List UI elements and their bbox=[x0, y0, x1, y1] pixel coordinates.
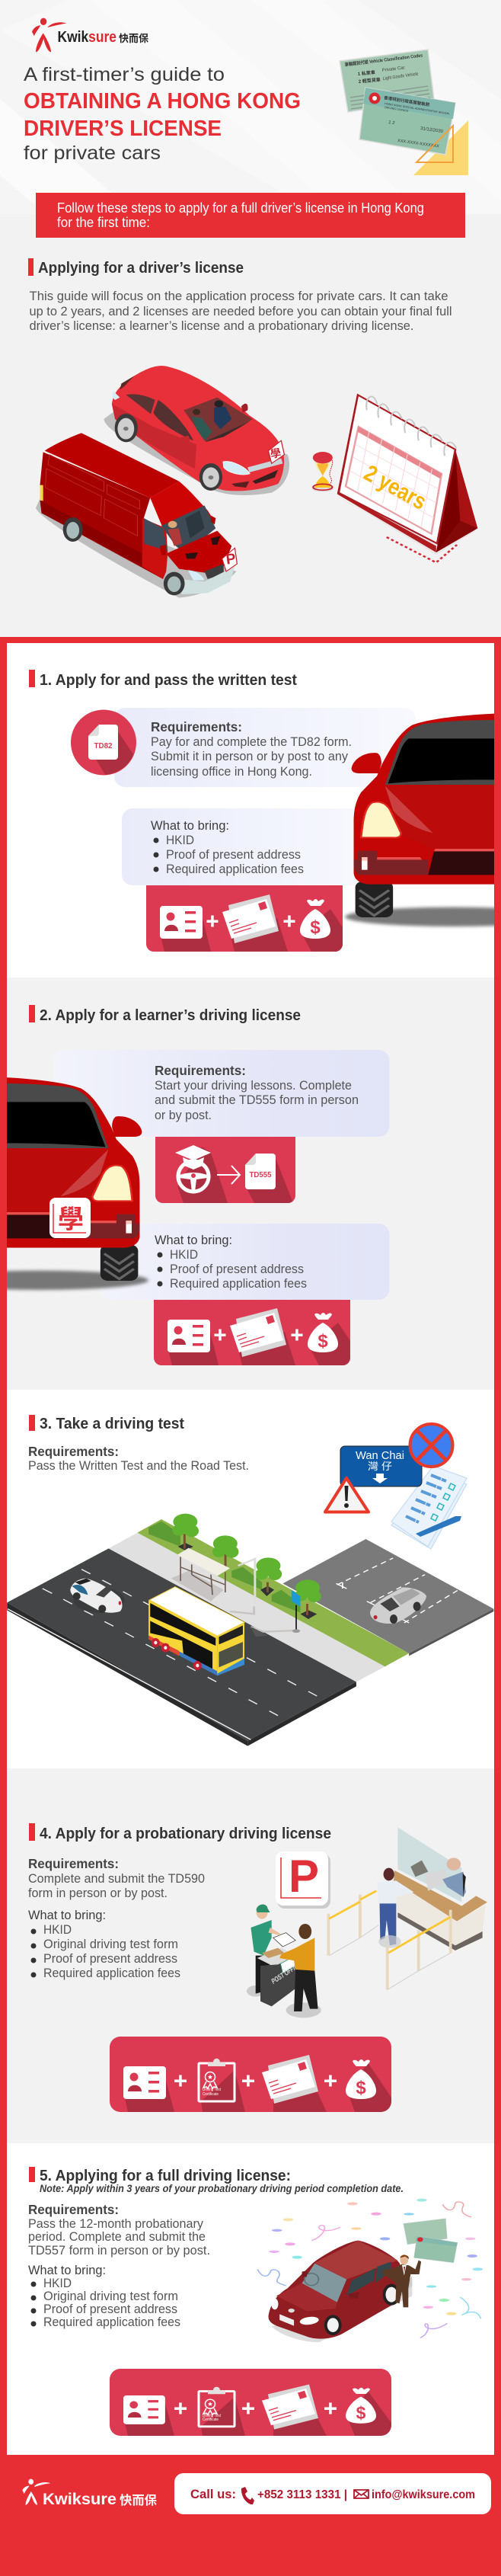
what to bring list: What to bring: bbox=[28, 1908, 106, 1922]
intro paragraph: up to 2 years, and 2 licenses are needed before you can obtain your final full bbox=[29, 305, 452, 318]
icon: driving license cards: DRIVING LICENCE bbox=[385, 106, 409, 113]
post office label: POST OFFICE bbox=[270, 1960, 303, 1986]
logo: Kwiksure bbox=[32, 18, 148, 52]
illustration: red probationary van bbox=[36, 433, 237, 597]
requirements bubble: and submit the TD555 form in person bbox=[155, 1093, 359, 1107]
contact bar bbox=[174, 2473, 491, 2514]
title bbox=[24, 64, 301, 164]
white car bbox=[74, 1587, 125, 1613]
icon: hourglass and calendar bbox=[312, 394, 477, 562]
bus bbox=[148, 1600, 217, 1675]
footer logo: 快而保 bbox=[120, 2494, 157, 2507]
panel: step 1 bbox=[29, 670, 501, 952]
red frame top and step sections bbox=[0, 637, 501, 2455]
intro banner: Follow these steps to apply for a full driver’s license in Hong Kong bbox=[57, 200, 424, 216]
requirements text bbox=[28, 1856, 205, 1900]
illustration: customer at post office bbox=[279, 1924, 321, 2018]
illustration: learner car front: 學 bbox=[58, 1205, 84, 1234]
requirements bubble: Start your driving lessons. Complete bbox=[155, 1079, 352, 1093]
what to bring list: Original driving test form bbox=[43, 2290, 178, 2303]
documents panel bbox=[110, 2037, 391, 2112]
title: OBTAINING A HONG KONG bbox=[24, 89, 301, 114]
requirements text: Requirements: bbox=[28, 1444, 119, 1459]
icon: driving license cards: 2 輕型貨車 bbox=[358, 76, 381, 85]
note: Note: Apply within 3 years of your probationary driving period completion date. bbox=[40, 2182, 404, 2194]
step 5 heading: 5. Applying for a full driving license: bbox=[40, 2168, 291, 2184]
panel: step 5 bbox=[28, 2167, 483, 2436]
documents panel: Certificate bbox=[203, 2418, 219, 2422]
requirements text: Complete and submit the TD590 bbox=[28, 1872, 205, 1886]
what to bring bubble: What to bring: bbox=[151, 818, 229, 833]
what to bring bubble: Proof of present address bbox=[170, 1262, 304, 1276]
what to bring list: HKID bbox=[43, 2277, 72, 2290]
requirements bubble bbox=[114, 708, 416, 787]
icon: driving license cards: 1 私家車 bbox=[357, 69, 375, 77]
footer bbox=[0, 2455, 501, 2576]
what to bring list: What to bring: bbox=[28, 2263, 106, 2277]
intro banner bbox=[36, 193, 465, 238]
what to bring bubble bbox=[100, 1224, 390, 1300]
icon: P plate bbox=[276, 1851, 330, 1909]
title: DRIVER’S LICENSE bbox=[24, 117, 222, 141]
illustration: learner car front bbox=[0, 1077, 148, 1290]
logo: Kwiksure: 快而保 bbox=[119, 33, 148, 44]
icon: driving license cards: Light Goods Vehicle bbox=[382, 72, 419, 82]
what to bring bubble: Required application fees bbox=[166, 862, 304, 876]
lesson and form panel bbox=[155, 1137, 295, 1203]
intro banner: for the first time: bbox=[57, 215, 150, 230]
requirements bubble: Requirements: bbox=[151, 719, 242, 734]
title: A first-timer’s guide to bbox=[24, 64, 225, 85]
icon: driving license cards: 31/12/2030 bbox=[420, 126, 444, 134]
intro paragraph: driver’s license: a learner’s license and a probationary driving license. bbox=[29, 319, 414, 333]
requirements text: Pass the 12-month probationary bbox=[28, 2217, 204, 2231]
documents panel: $ bbox=[356, 2078, 366, 2098]
intro paragraph bbox=[29, 290, 452, 333]
step 2 heading: 2. Apply for a learner’s driving license bbox=[40, 1007, 301, 1024]
icon: driving license cards bbox=[340, 50, 468, 175]
illustration: red car front bbox=[345, 714, 501, 926]
illustration: road scene bbox=[7, 1514, 493, 1746]
icon: driving license cards: Private Car bbox=[382, 66, 405, 73]
requirements bubble: licensing office in Hong Kong. bbox=[151, 765, 312, 779]
panel: step 2 bbox=[0, 1005, 390, 1365]
grey car bbox=[370, 1587, 426, 1624]
probationary plate letter: P bbox=[225, 551, 237, 568]
icon: driving license cards: XXX-XXXX-XXXXXXX bbox=[397, 139, 439, 149]
icon: TD82 form bbox=[71, 710, 136, 776]
what to bring list bbox=[28, 2263, 180, 2329]
requirements text: Pass the Written Test and the Road Test. bbox=[28, 1459, 249, 1473]
courier bbox=[247, 1986, 264, 1997]
what to bring bubble: HKID bbox=[166, 834, 194, 847]
requirements bubble: Pay for and complete the TD82 form. bbox=[151, 735, 352, 749]
documents panel bbox=[110, 2369, 391, 2436]
red frame sides bbox=[0, 643, 501, 2456]
requirements bubble: Requirements: bbox=[155, 1063, 246, 1078]
contact bar: info@kwiksure.com bbox=[372, 2488, 475, 2501]
what to bring list: Original driving test form bbox=[43, 1938, 178, 1951]
panel: step 3 bbox=[7, 1415, 493, 1746]
heading: applying for a driver's license: Applying for a driver’s license bbox=[38, 260, 244, 277]
requirements text bbox=[28, 1444, 249, 1473]
requirements text: form in person or by post. bbox=[28, 1886, 168, 1900]
contact bar: +852 3113 1331 | bbox=[257, 2488, 347, 2501]
documents panel: $ bbox=[356, 2403, 366, 2423]
what to bring list: Proof of present address bbox=[43, 1952, 177, 1966]
requirements text: Requirements: bbox=[28, 2202, 119, 2217]
step 1 heading: 1. Apply for and pass the written test bbox=[40, 672, 297, 689]
what to bring list: Required application fees bbox=[43, 2315, 180, 2329]
title: for private cars bbox=[24, 142, 161, 164]
requirements text: Requirements: bbox=[28, 1856, 119, 1871]
documents panel: $ bbox=[310, 917, 321, 938]
icon: driving license cards: 1 2 bbox=[388, 120, 395, 126]
what to bring bubble bbox=[122, 808, 373, 885]
illustration: red learner car bbox=[104, 366, 289, 495]
icon: P plate: P bbox=[289, 1851, 319, 1902]
icon: driving license cards: 車輛類別代號 Vehicle Classification Codes bbox=[344, 52, 423, 68]
illustration: licensing counter bbox=[247, 1827, 487, 2006]
lesson and form panel: TD555 bbox=[250, 1170, 272, 1179]
step 4 heading: 4. Apply for a probationary driving license bbox=[40, 1826, 331, 1842]
requirements text: period. Complete and submit the bbox=[28, 2230, 206, 2244]
contact bar: Call us: bbox=[190, 2487, 236, 2501]
documents panel: Certificate bbox=[203, 2092, 219, 2097]
requirements bubble bbox=[53, 1050, 390, 1137]
icon: hourglass and calendar: 2 years bbox=[360, 460, 431, 515]
panel: step 4 bbox=[28, 1823, 487, 2112]
footer logo: Kwiksure bbox=[43, 2491, 116, 2508]
what to bring bubble: HKID bbox=[170, 1248, 198, 1262]
requirements text bbox=[28, 2202, 210, 2258]
documents panel: Driving Test bbox=[203, 2414, 221, 2418]
illustration: road signs and test sheet: 灣 仔 bbox=[368, 1461, 392, 1472]
documents panel: $ bbox=[318, 1331, 328, 1352]
illustration: road signs and test sheet: Wan Chai bbox=[356, 1449, 404, 1462]
what to bring list: HKID bbox=[43, 1923, 72, 1937]
documents panel bbox=[154, 1300, 350, 1365]
footer logo bbox=[22, 2479, 157, 2508]
documents panel: Driving Test bbox=[203, 2088, 221, 2092]
what to bring bubble: Required application fees bbox=[170, 1277, 307, 1291]
icon: driving license cards: HONG KONG SPECIAL ADMINISTRATIVE REGION bbox=[385, 102, 450, 116]
step 3 heading: 3. Take a driving test bbox=[40, 1416, 184, 1432]
illustration: car, licensed driver and confetti bbox=[257, 2199, 483, 2342]
requirements text: TD557 form in person or by post. bbox=[28, 2244, 210, 2258]
what to bring list: Proof of present address bbox=[43, 2302, 177, 2316]
icon: TD82 form: TD82 bbox=[94, 741, 113, 750]
icon: driving license cards: 香港特別行政區駕駛執照 bbox=[384, 94, 430, 108]
what to bring list bbox=[28, 1908, 180, 1980]
requirements bubble: or by post. bbox=[155, 1109, 212, 1122]
what to bring bubble: Proof of present address bbox=[166, 848, 301, 862]
logo: Kwiksure: Kwiksure bbox=[58, 29, 116, 46]
illustration: road signs and test sheet bbox=[325, 1424, 467, 1549]
documents panel bbox=[146, 885, 343, 952]
requirements bubble: Submit it in person or by post to any bbox=[151, 750, 349, 763]
what to bring bubble: What to bring: bbox=[155, 1233, 232, 1247]
intro paragraph: This guide will focus on the application process for private cars. It can take bbox=[29, 290, 448, 303]
what to bring list: Required application fees bbox=[43, 1966, 180, 1980]
learner plate character: 學 bbox=[270, 446, 282, 460]
